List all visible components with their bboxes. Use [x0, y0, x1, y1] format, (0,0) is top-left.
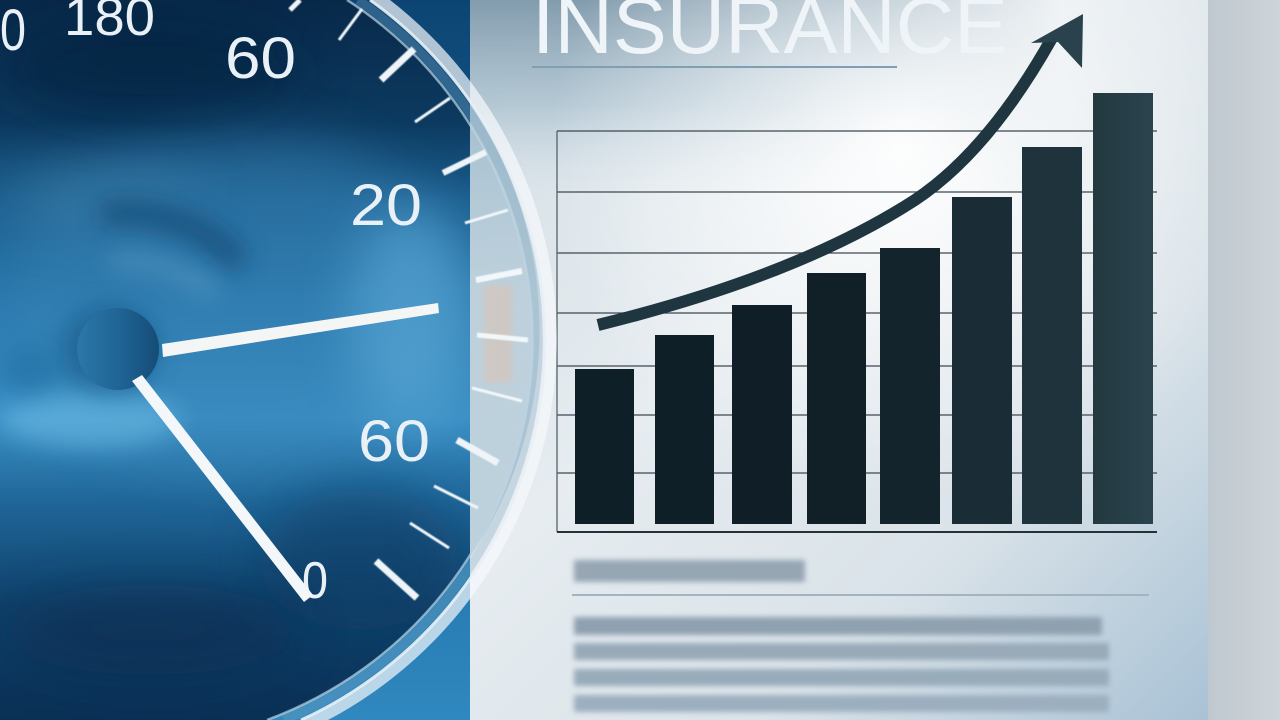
gauge: speed numbers: 60 — [225, 26, 296, 91]
heading underline — [532, 66, 897, 68]
gauge: short needle — [132, 375, 313, 602]
gauge: speed numbers: 0 — [302, 552, 328, 610]
gauge: orange reflection — [484, 285, 512, 383]
panel: insurance document — [470, 0, 1208, 720]
panel: grey side strip — [1208, 0, 1280, 720]
bar chart: rising premiums — [557, 14, 1157, 532]
gauge: speedometer dial — [0, 0, 470, 720]
arrow: upward trend — [598, 14, 1083, 325]
gauge: speed numbers — [0, 0, 430, 610]
chart grid — [557, 131, 1157, 532]
gauge: long needle — [162, 303, 439, 357]
gauge: glass section over document — [470, 103, 540, 557]
document body text: blurred lines — [574, 560, 1109, 712]
gauge: speed numbers: 20 — [350, 173, 422, 238]
gauge: outer glass band over document — [301, 0, 557, 720]
gauge: rim highlight — [267, 0, 545, 720]
dial motion blur — [0, 20, 470, 675]
background: blue left panel — [0, 0, 472, 720]
gauge: tick marks — [290, 0, 528, 598]
gauge: hub — [62, 306, 159, 394]
document divider — [572, 594, 1149, 596]
bars — [575, 93, 1153, 524]
gauge: speed numbers: 60 — [358, 409, 430, 474]
